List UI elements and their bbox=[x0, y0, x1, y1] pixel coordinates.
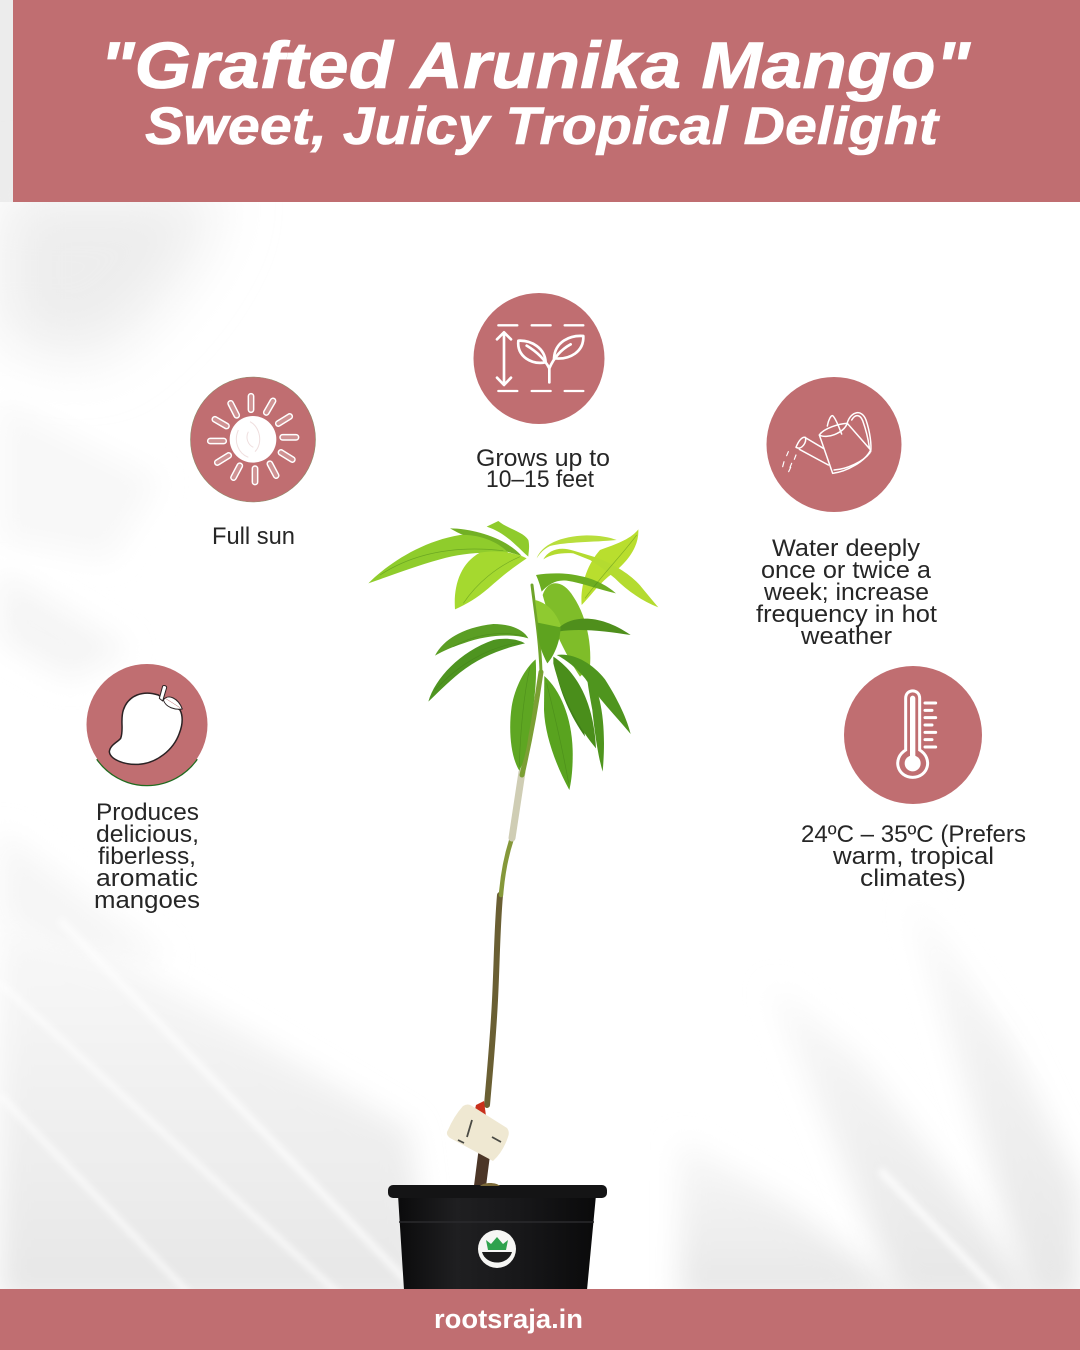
plant tag bbox=[447, 1101, 509, 1161]
icon: mango bbox=[86, 664, 208, 785]
footer website text: rootsraja.in bbox=[434, 1304, 583, 1334]
label: grows up to: Grows up to bbox=[476, 445, 610, 472]
label: watering: frequency in hot bbox=[756, 601, 937, 628]
icon: thermometer bbox=[844, 666, 982, 804]
title line 2: Sweet, Juicy Tropical Delight bbox=[145, 97, 941, 156]
icon: full sun bbox=[190, 377, 316, 502]
label: produces: aromatic bbox=[96, 865, 198, 892]
label: produces bbox=[94, 799, 200, 914]
pot logo badge bbox=[478, 1230, 516, 1268]
label: watering: Water deeply bbox=[772, 535, 920, 562]
label: full sun: Full sun bbox=[212, 523, 295, 550]
label: produces: fiberless, bbox=[98, 843, 196, 870]
label: watering: week; increase bbox=[763, 579, 929, 606]
label: temperature: warm, tropical bbox=[832, 843, 994, 870]
label: grows up to: 10–15 feet bbox=[486, 466, 594, 493]
label: grows up to bbox=[476, 445, 610, 493]
label: produces: mangoes bbox=[94, 887, 200, 914]
pot bbox=[388, 1183, 607, 1290]
label: temperature: climates) bbox=[860, 865, 966, 892]
title line 1: "Grafted Arunika Mango" bbox=[100, 28, 971, 102]
label: produces: Produces bbox=[96, 799, 199, 826]
icon: plant height bbox=[474, 293, 604, 424]
header banner bbox=[13, 0, 1080, 202]
plant stem bbox=[480, 585, 541, 1186]
label: watering: once or twice a bbox=[761, 557, 932, 584]
label: watering bbox=[756, 535, 937, 650]
label: temperature bbox=[801, 821, 1026, 892]
footer banner bbox=[0, 1289, 1080, 1350]
label: watering: weather bbox=[800, 623, 892, 650]
label: temperature: 24ºC – 35ºC (Prefers bbox=[801, 821, 1026, 848]
plant: mango sapling in pot bbox=[368, 521, 658, 1290]
plant leaves bbox=[368, 521, 658, 790]
label: produces: delicious, bbox=[96, 821, 199, 848]
icon: watering can bbox=[766, 377, 902, 512]
